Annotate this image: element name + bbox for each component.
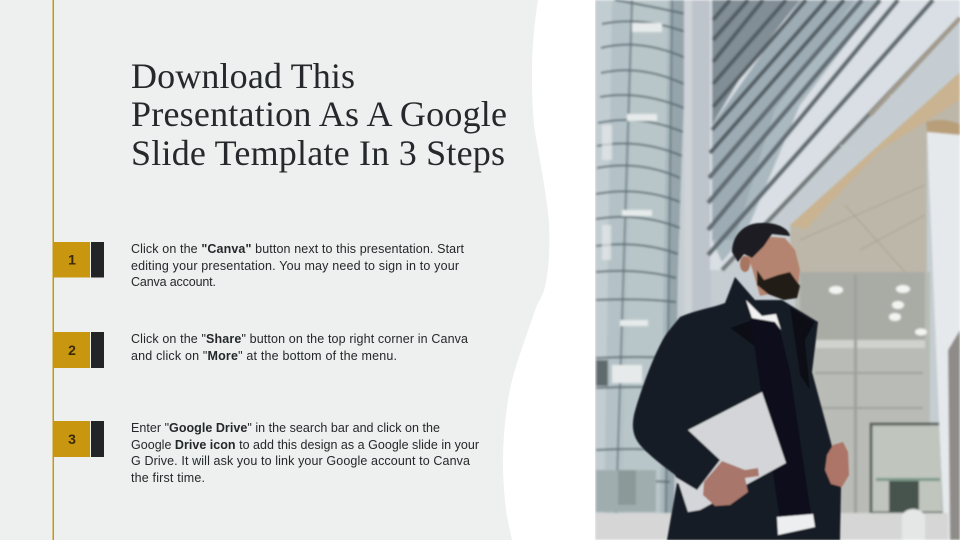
step 1 [54,242,465,289]
lobby interior [795,272,930,514]
cuff over laptop [674,429,720,490]
beard [757,270,800,300]
laptop [677,392,786,512]
revolving entrance [870,424,944,514]
step 1 text: editing your presentation. You may need to sign in to your [131,259,459,273]
step 1 text: Canva account. [131,275,216,289]
shirt collar [746,300,781,330]
coat [633,277,841,540]
step 3 text: Enter "Google Drive" in the search bar and click on the [131,421,440,435]
step 1 number badge: 1 [68,252,76,268]
sweater [750,318,812,522]
shirt hem [777,514,815,535]
step 3 [54,421,479,485]
step 1 number badge [54,242,104,278]
coat lapel shadow [730,307,815,390]
white column [927,128,960,540]
background panel with wavy edge [0,0,549,540]
step 3 text: the first time. [131,471,205,485]
step 2 text: and click on "More" at the bottom of the menu. [131,349,397,363]
hair [732,223,790,262]
man [633,223,849,540]
glass tower [596,0,688,513]
title [131,56,507,173]
lobby ceiling lights [829,285,927,336]
ear [740,256,750,272]
vertical gold rule [52,0,54,540]
step 2 text: Click on the "Share" button on the top right corner in Canva [131,332,468,346]
building backdrop [595,0,960,540]
canopy underside [789,100,960,273]
pavement [595,513,948,540]
photo: businessman with laptop in front of glass building [595,0,960,540]
step 3 text: G Drive. It will ask you to link your Google account to Canva [131,454,470,468]
step 3 number badge [54,421,104,457]
neck and face [745,236,800,296]
step 2 number badge: 2 [68,342,76,358]
title: Slide Template In 3 Steps [131,133,505,173]
step 2 text [131,332,468,363]
diagonal facade slats [708,0,960,270]
concrete column [694,2,710,310]
step 2 [54,332,468,368]
step 3 text: Google Drive icon to add this design as a Google slide in your [131,438,479,452]
step 3 text [131,421,479,485]
title: Presentation As A Google [131,94,507,134]
step 1 text [131,242,465,289]
bollard [902,509,925,540]
step 3 number badge: 3 [68,431,76,447]
step 1 text: Click on the "Canva" button next to this presentation. Start [131,242,465,256]
hand on coat [825,442,849,487]
title: Download This [131,56,355,96]
hand on laptop [703,461,759,506]
step 2 number badge [54,332,104,368]
